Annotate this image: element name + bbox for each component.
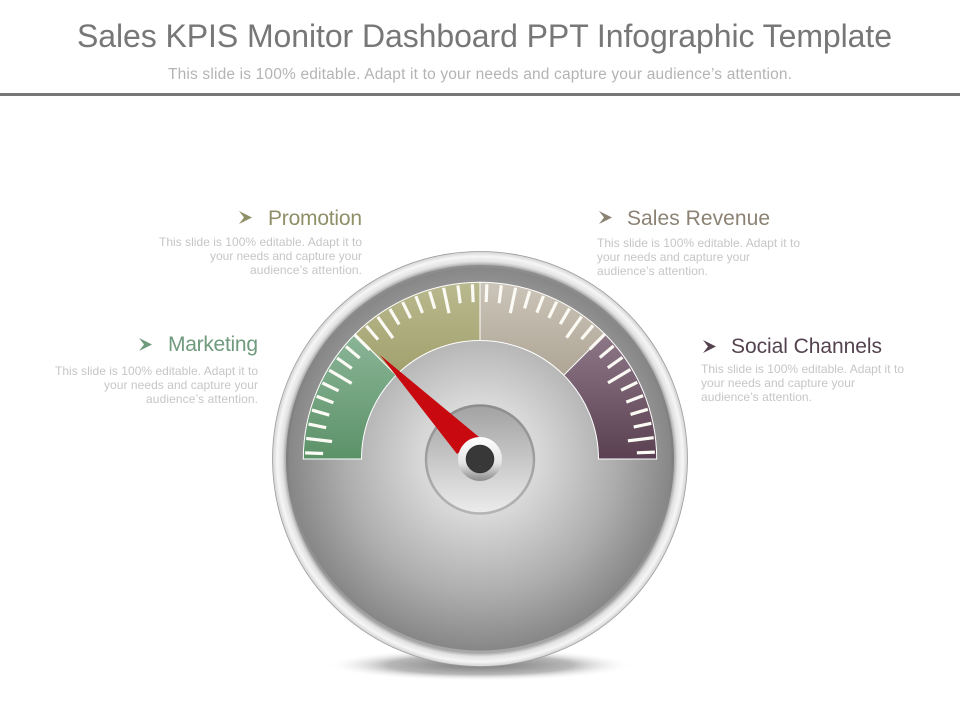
panel: promotion label — [159, 207, 362, 277]
promotion text — [159, 235, 362, 277]
segment: promotion olive — [355, 282, 480, 375]
social channels text: your needs and capture your — [701, 376, 855, 390]
segment: social channels plum — [564, 334, 657, 459]
promotion text: This slide is 100% editable. Adapt it to — [159, 235, 362, 249]
header divider — [0, 93, 960, 96]
title: Sales KPIS Monitor Dashboard PPT Infographic Template — [77, 18, 892, 54]
icon: marketing arrow — [139, 338, 152, 351]
sales revenue text: This slide is 100% editable. Adapt it to — [597, 236, 800, 250]
panel: sales revenue label — [597, 207, 800, 278]
icon: social channels arrow — [703, 340, 716, 353]
gauge tick marks — [305, 284, 655, 454]
needle hub cap — [466, 445, 494, 473]
panel: social channels label — [701, 335, 904, 404]
gauge bezel — [272, 252, 688, 666]
gauge needle — [380, 355, 479, 454]
sales revenue text: audience’s attention. — [597, 264, 708, 278]
gauge inner rim — [286, 265, 674, 653]
marketing heading: Marketing — [168, 333, 258, 356]
segment: sales revenue taupe — [480, 282, 605, 375]
marketing text: audience’s attention. — [146, 392, 258, 406]
segment: marketing green — [303, 334, 396, 459]
gauge drop shadow — [326, 649, 634, 681]
promotion text: your needs and capture your — [210, 249, 362, 263]
sales revenue heading: Sales Revenue — [627, 207, 770, 230]
panel: marketing label — [55, 333, 258, 406]
panel: gauge — [272, 252, 688, 666]
social channels text — [701, 362, 904, 404]
needle hub ring — [458, 437, 502, 481]
social channels text: This slide is 100% editable. Adapt it to — [701, 362, 904, 376]
hub disc — [426, 406, 534, 514]
sales revenue text: your needs and capture your — [597, 250, 750, 264]
icon: promotion arrow — [239, 211, 252, 224]
subtitle: This slide is 100% editable. Adapt it to your needs and capture your audience’s attention. — [168, 66, 792, 83]
promotion text: audience’s attention. — [250, 263, 362, 277]
social channels heading: Social Channels — [731, 335, 882, 358]
marketing text — [55, 364, 258, 406]
sales revenue text — [597, 236, 800, 278]
social channels text: audience’s attention. — [701, 390, 812, 404]
marketing text: This slide is 100% editable. Adapt it to — [55, 364, 258, 378]
icon: sales revenue arrow — [599, 211, 612, 224]
gauge face — [288, 268, 672, 650]
promotion heading: Promotion — [268, 207, 362, 230]
marketing text: your needs and capture your — [104, 378, 258, 392]
